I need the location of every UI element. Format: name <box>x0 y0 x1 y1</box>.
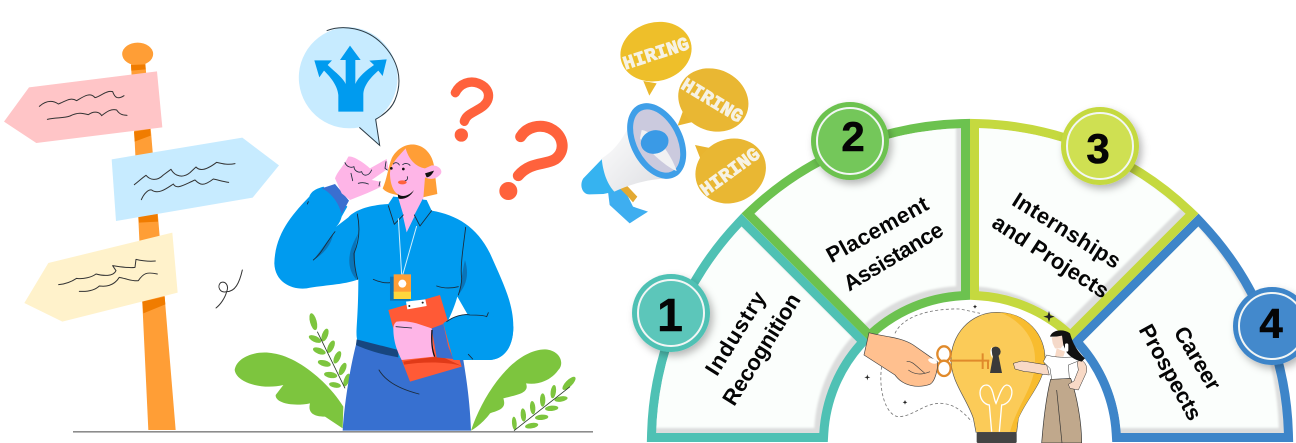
segment 4: Career Prospects: Career <box>1169 322 1227 395</box>
segment 1: Industry Recognition <box>651 222 857 433</box>
bubble 2 <box>668 57 759 143</box>
number badge 4: 4 <box>1259 300 1283 347</box>
lanyard <box>398 218 417 275</box>
hair <box>383 144 437 197</box>
number badge 2: 2 <box>841 113 865 160</box>
face and neck <box>390 148 441 232</box>
segment 2: Placement Assistance <box>749 123 961 329</box>
skirt <box>343 340 471 431</box>
sparkles <box>864 305 1055 405</box>
key <box>937 346 989 376</box>
segment 4: Career Prospects: Prospects <box>1134 320 1207 425</box>
question mark large <box>499 126 562 200</box>
dashed path <box>881 309 980 422</box>
post cap <box>122 43 153 65</box>
question mark small <box>455 82 489 142</box>
sprig stems <box>317 332 570 431</box>
bubble 3 <box>685 127 777 215</box>
bubble 1 <box>614 14 698 96</box>
bubble 3: HIRING <box>696 143 765 201</box>
squiggle loop <box>216 270 242 308</box>
number badge 3: 3 <box>1086 125 1110 172</box>
bubble 1: HIRING <box>620 33 692 75</box>
leaves <box>235 312 577 431</box>
segment 3: Internships and Projects <box>974 123 1186 329</box>
shirt <box>274 187 513 360</box>
post <box>131 63 176 430</box>
number badge 1 <box>632 274 710 352</box>
megaphone <box>581 93 698 223</box>
sign: blue <box>112 138 279 221</box>
segment 3: Internships and Projects: Internships <box>1008 187 1126 274</box>
holding hand <box>393 321 435 360</box>
keyhole <box>990 347 1002 373</box>
collar <box>388 197 432 226</box>
segment 2: Placement Assistance: Placement <box>822 191 933 268</box>
segment 4: Career Prospects <box>1078 222 1284 433</box>
semicircle chart with four segments <box>632 102 1296 433</box>
belt <box>356 339 398 357</box>
megaphone with hiring bubbles <box>581 14 777 223</box>
lightbulb <box>951 312 1045 443</box>
id badge <box>390 274 411 301</box>
segment 2: Placement Assistance: Assistance <box>839 217 948 296</box>
number badge 2 <box>811 102 889 180</box>
clipboard <box>388 295 462 382</box>
hand <box>864 333 938 386</box>
sign: pink <box>4 71 162 143</box>
sign: yellow <box>24 233 178 322</box>
segment 1: Industry Recognition: Recognition <box>717 289 806 410</box>
number badge 3 <box>1061 107 1139 185</box>
woman <box>1013 330 1087 443</box>
ground line <box>73 431 593 433</box>
speech bubble with three-way arrow <box>299 27 399 145</box>
post shadows <box>131 64 165 313</box>
number badge 4 <box>1233 287 1296 365</box>
segment 3: Internships and Projects: and Projects <box>988 209 1114 303</box>
signpost illustration <box>4 43 279 430</box>
person thinking illustration <box>235 27 577 431</box>
bubble 2: HIRING <box>677 74 747 128</box>
segment 1: Industry Recognition: Industry <box>700 286 771 380</box>
key and lightbulb illustration <box>864 305 1087 443</box>
number badge 1: 1 <box>657 289 683 341</box>
forearm <box>432 313 513 360</box>
raised hand <box>322 156 388 214</box>
